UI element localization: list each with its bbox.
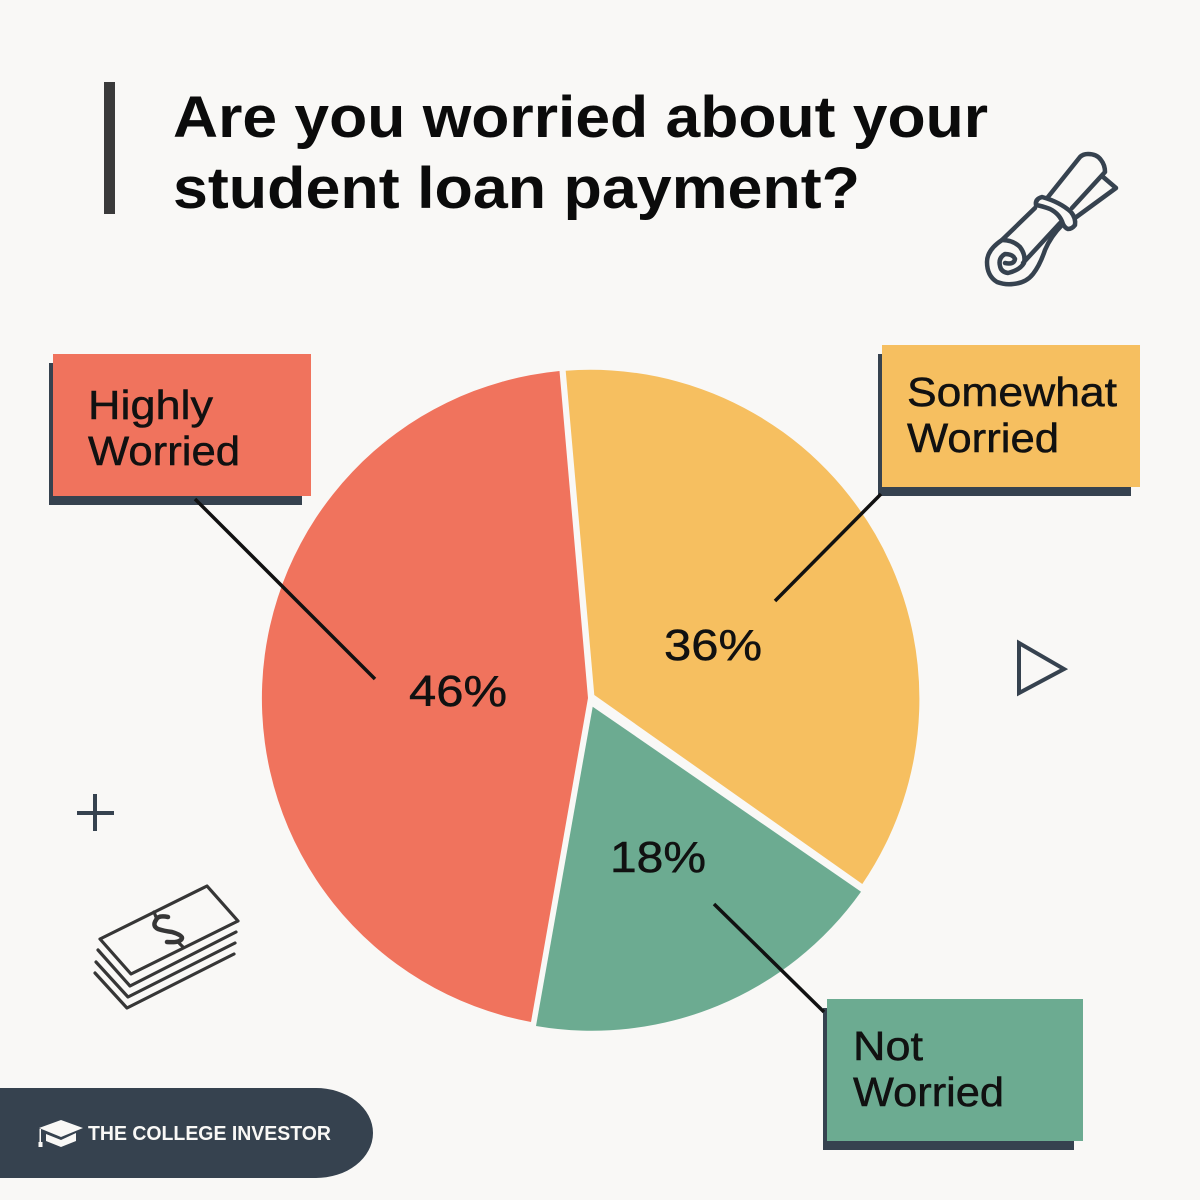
slice: not worried 18%	[536, 707, 861, 1031]
icon: graduation cap	[38, 1120, 83, 1147]
label: somewhat worried	[878, 345, 1140, 496]
slice: somewhat worried 36%	[566, 370, 919, 884]
label: somewhat worried: Worried	[907, 415, 1059, 461]
value: 46%: 46%	[409, 667, 507, 716]
title accent bar	[104, 82, 115, 214]
title	[173, 85, 988, 221]
slice: highly worried 46%	[262, 371, 588, 1022]
value: 18%: 18%	[610, 833, 706, 882]
brand name: THE COLLEGE INVESTOR	[88, 1123, 332, 1145]
icon: plus	[77, 794, 114, 831]
title: student loan payment?	[173, 156, 860, 221]
label: somewhat worried: Somewhat	[907, 369, 1118, 415]
pie chart	[262, 370, 919, 1031]
icon: money stack	[95, 886, 238, 1008]
label: highly worried: Highly	[88, 382, 214, 428]
brand badge	[0, 1088, 373, 1178]
label: highly worried	[49, 354, 311, 505]
label: highly worried: Worried	[88, 428, 240, 474]
label: not worried	[823, 999, 1083, 1150]
label: not worried: Not	[853, 1023, 924, 1069]
icon: diploma scroll	[987, 154, 1116, 284]
leader line: not worried	[714, 904, 824, 1012]
title: Are you worried about your	[173, 85, 988, 150]
label: not worried: Worried	[853, 1069, 1004, 1115]
icon: triangle play	[1019, 643, 1064, 693]
leader line: highly worried	[195, 499, 375, 679]
value: 36%: 36%	[664, 621, 762, 670]
leader line: somewhat worried	[775, 494, 881, 601]
